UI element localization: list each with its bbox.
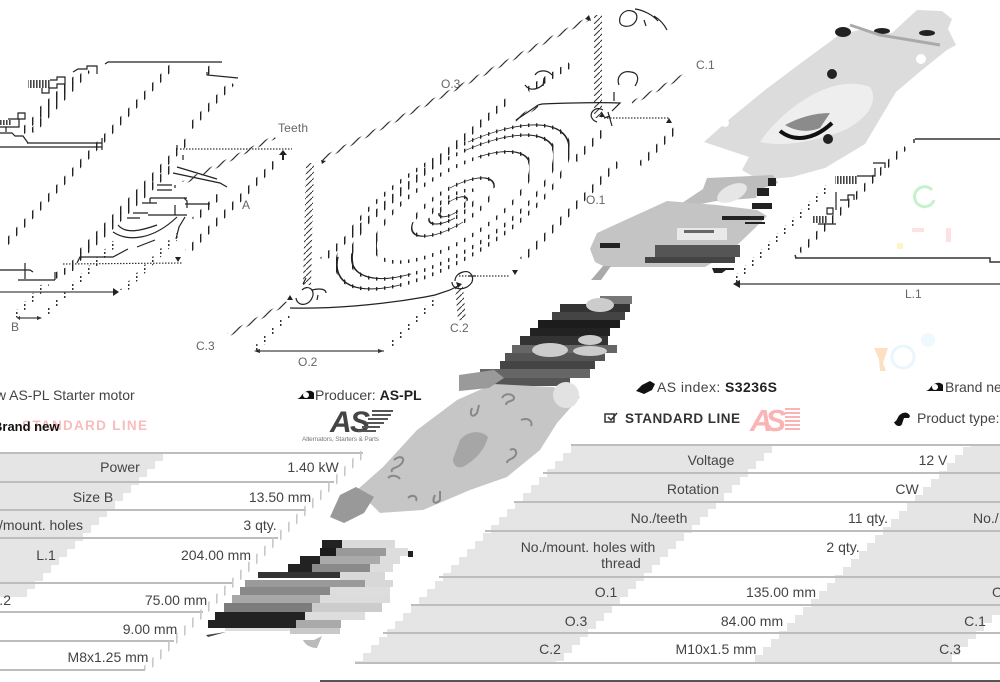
icon: check	[605, 413, 617, 422]
dark lower bar	[645, 257, 735, 263]
lighter shoulder	[760, 84, 873, 144]
dotted extension	[255, 315, 288, 350]
label: B: B	[11, 320, 19, 334]
table text, rotation row: Rotation	[667, 481, 719, 497]
dark bolts	[823, 27, 935, 144]
concentric rings with tick pattern	[337, 125, 569, 289]
dotted extension	[388, 299, 436, 348]
label: C.1: C.1	[696, 58, 715, 72]
grey label cells	[0, 453, 163, 597]
inner rib lines	[127, 145, 227, 218]
ear top	[459, 370, 504, 391]
ear right	[553, 382, 579, 408]
plate recess	[453, 432, 488, 467]
AS-PL logo: Alternators, Starters & Parts	[302, 436, 380, 443]
outlines	[795, 139, 1000, 262]
table text, C.2 row: C.2	[539, 641, 561, 657]
flange horizontal outline	[290, 103, 620, 308]
label: C.2: C.2	[450, 321, 469, 335]
grey label cells, far right	[755, 445, 1000, 663]
teeth leader	[183, 137, 275, 183]
small step details	[0, 77, 65, 143]
value: M8x1.25 mm	[68, 649, 148, 665]
dark housing stripe	[655, 245, 740, 257]
body	[590, 201, 767, 267]
label: O.3: O.3	[441, 77, 461, 91]
inner curves	[77, 217, 185, 263]
solenoid	[673, 175, 778, 209]
dotted extension	[732, 187, 828, 283]
header: product type: Product type:	[917, 410, 1000, 426]
panel: specification table, left group	[0, 453, 363, 670]
value: 13.50 mm	[249, 489, 311, 505]
silver swirls	[532, 298, 614, 357]
dimension arrows	[254, 15, 672, 353]
value: 84.00 mm	[721, 613, 783, 629]
icon: brand	[926, 383, 943, 391]
bearing ring	[785, 113, 830, 131]
pale motor artifacts	[874, 187, 951, 371]
flange outer lines	[322, 65, 678, 260]
value: 2 qty.	[826, 539, 860, 555]
value: 1.40 kW	[287, 459, 339, 475]
pale standard line text: STANDARD LINE	[22, 418, 147, 433]
value: 75.00 mm	[145, 592, 207, 608]
photo: starter side view, middle right	[590, 175, 778, 280]
icon: producer	[297, 391, 314, 399]
thread hatch	[835, 176, 857, 184]
label: C.3	[939, 641, 961, 657]
mounting hook	[303, 636, 322, 648]
vertical lines	[800, 147, 905, 252]
photo: starter rear view, centre	[330, 296, 632, 523]
label text area	[684, 230, 714, 233]
long vertical lines	[6, 64, 275, 276]
small step details	[818, 163, 885, 224]
long dimension	[735, 283, 1000, 285]
thread hatch	[28, 80, 50, 88]
header: AS index: AS index: S3236S	[657, 379, 777, 395]
value: 3 qty.	[243, 517, 277, 533]
table text, voltage row: Voltage	[688, 452, 735, 468]
label: C.3: C.3	[196, 339, 215, 353]
swirl logo	[714, 179, 750, 207]
drawing: side outline, left	[0, 62, 292, 320]
dotted extension lines	[15, 149, 292, 316]
dark contacts	[600, 178, 776, 273]
L.1 row: L.1	[36, 547, 56, 563]
AS-PL logo: AS	[329, 406, 370, 439]
header: standard line: STANDARD LINE	[625, 411, 740, 426]
grey label cells, middle	[355, 445, 772, 663]
value: CW	[895, 481, 919, 497]
ear left	[330, 487, 374, 523]
holes	[721, 54, 926, 127]
drawing: flange, front view	[228, 9, 685, 353]
table text, threaded holes row: No./mount. holes with	[521, 539, 655, 555]
top ridge	[850, 25, 940, 45]
red AS logo: AS	[749, 403, 786, 438]
value: 204.00 mm	[181, 547, 251, 563]
thread hatch small	[0, 120, 11, 125]
row rules	[0, 453, 363, 670]
horizontal outlines	[0, 62, 238, 280]
right group clipped label: No./	[973, 510, 999, 526]
row rules	[355, 445, 1000, 663]
value: 135.00 mm	[746, 584, 816, 600]
power row: Power	[100, 459, 140, 475]
label: A: A	[242, 198, 250, 212]
header: producer: Producer: AS-PL	[315, 387, 422, 403]
dimension arrows	[0, 150, 287, 320]
drawing: side outline, right	[732, 139, 1000, 371]
label: O.2: O.2	[298, 355, 318, 369]
front tip	[206, 632, 226, 637]
dotted dimension lines	[459, 118, 669, 276]
label second line: thread	[601, 555, 641, 571]
ring arcs	[306, 125, 590, 289]
arrow head	[733, 280, 740, 288]
seal ring black	[780, 123, 832, 138]
head bands	[340, 540, 395, 548]
size row: Size B	[73, 489, 113, 505]
plate	[357, 384, 580, 513]
sloped dashed leaders	[322, 18, 590, 159]
table text, O.3 row: O.3	[565, 613, 587, 629]
photo: starter side view, lower centre	[206, 540, 413, 648]
right border ticks	[145, 453, 363, 670]
photo: starter front view, top right	[704, 10, 956, 180]
label: L.1: L.1	[905, 287, 922, 301]
icon: product type	[894, 413, 910, 426]
icon: index	[636, 381, 655, 394]
value: 12 V	[919, 452, 948, 468]
body bands	[245, 580, 365, 587]
table text, O.1 row: O.1	[595, 584, 617, 600]
label	[677, 228, 727, 240]
thread hatch lower	[813, 216, 827, 223]
value: M10x1.5 mm	[676, 641, 756, 657]
AS-PL logo	[302, 406, 393, 443]
value: 9.00 mm	[123, 621, 177, 637]
label: C.1	[964, 613, 986, 629]
label: teeth: Teeth	[278, 121, 308, 135]
value: 11 qty.	[848, 510, 888, 526]
table text, teeth row: No./teeth	[631, 510, 687, 526]
gear head, dark bands	[480, 296, 632, 386]
mounting ears	[296, 9, 667, 304]
housing	[704, 10, 956, 180]
panel: specification table, right group	[355, 445, 1000, 663]
bottom strip	[320, 680, 1000, 682]
label: O.1: O.1	[586, 193, 606, 207]
hatch lines	[307, 163, 310, 285]
plate holes	[388, 394, 532, 503]
tail piece	[591, 266, 611, 280]
